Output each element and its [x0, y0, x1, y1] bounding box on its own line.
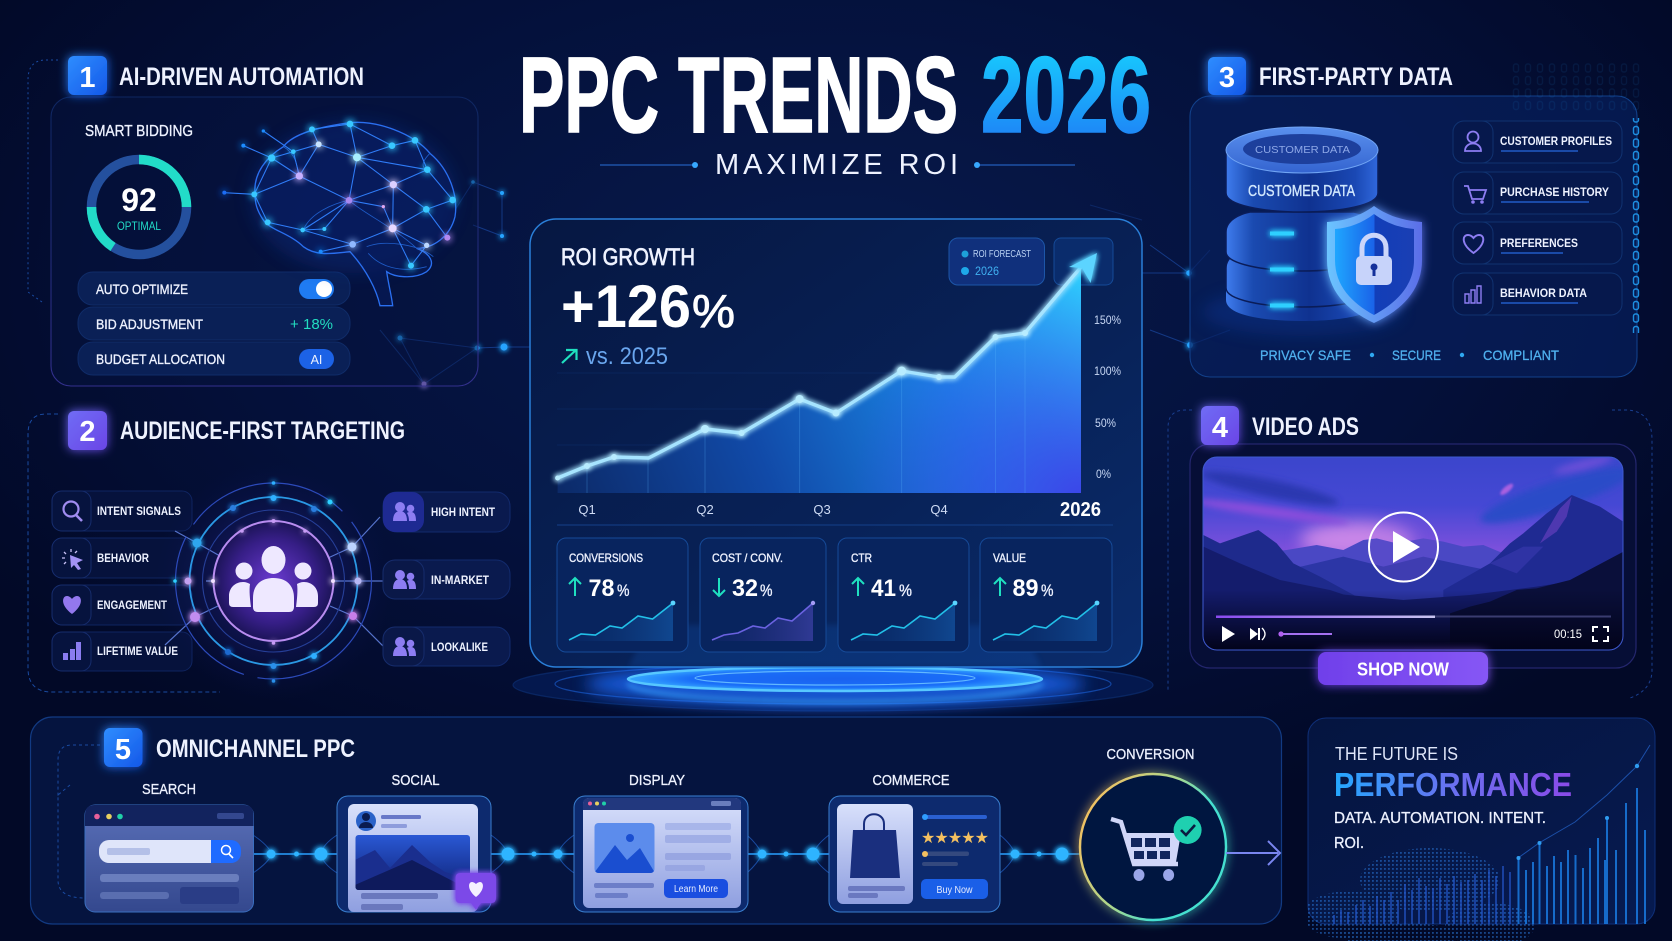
row: auto optimize: AUTO OPTIMIZE [96, 281, 188, 297]
chart trend nodes [1516, 745, 1650, 860]
x axis labels [578, 499, 1101, 521]
smart bidding label: SMART BIDDING [85, 123, 193, 140]
metric card: conversions: % [617, 581, 630, 600]
step: search [85, 782, 254, 912]
panel frame [1190, 96, 1637, 377]
step: social [337, 773, 496, 912]
panel frame [1308, 718, 1655, 924]
progress bar [1216, 616, 1611, 618]
y axis labels: 50% [1095, 418, 1116, 430]
trend line [558, 267, 1081, 478]
privacy line: PRIVACY SAFE [1260, 347, 1351, 363]
dashboard frame [530, 219, 1142, 667]
connector bracket [28, 60, 58, 302]
metric card: cost per conversion: % [760, 581, 772, 600]
icon: cart [1111, 816, 1202, 881]
row: engagement: ENGAGEMENT [97, 598, 168, 612]
badge 5: 5 [115, 734, 131, 766]
gauge [91, 160, 186, 254]
panel: audience-first targeting [28, 411, 510, 701]
x axis labels: Q3 [813, 502, 831, 517]
row: lookalike [383, 627, 510, 666]
audience orbit hub [154, 461, 394, 701]
panel: AI-driven automation [28, 56, 478, 386]
row: high intent: HIGH INTENT [431, 505, 496, 519]
row: lifetime value: LIFETIME VALUE [97, 644, 178, 658]
step: conversion [1080, 747, 1226, 920]
row: intent signals: INTENT SIGNALS [97, 504, 181, 518]
database cylinder [1202, 127, 1402, 336]
metric card: ctr [838, 538, 969, 652]
row: bid adjustment: BID ADJUSTMENT [96, 316, 203, 332]
y axis labels: 0% [1096, 469, 1111, 481]
left signal rows [52, 491, 192, 671]
panel: the future is performance [1302, 718, 1655, 941]
light beams [628, 625, 1042, 667]
metric card: value: % [1041, 581, 1054, 600]
title: PPC TRENDS: PPC TRENDS [519, 34, 958, 155]
metric card: cost per conversion: 32 [732, 575, 758, 602]
y axis labels: 100% [1094, 366, 1121, 378]
brain illustration [222, 120, 457, 306]
subtitle: MAXIMIZE ROI [715, 149, 958, 181]
x axis labels: Q2 [696, 502, 714, 517]
badge 2 [68, 411, 107, 450]
badge 2: 2 [79, 416, 96, 448]
network nodes background [398, 180, 1193, 386]
y axis labels: 150% [1094, 315, 1121, 327]
badge 3 [1208, 57, 1246, 95]
top label: CUSTOMER DATA [1255, 145, 1350, 156]
binary texture [1630, 118, 1642, 333]
metric card: cost per conversion [700, 538, 826, 652]
row: high intent [383, 492, 510, 532]
row: bid adjustment [78, 307, 350, 340]
player controls: 00:15 [1554, 627, 1582, 641]
row: lifetime value [52, 632, 192, 671]
badge 1 [68, 56, 107, 95]
row: behavior data: BEHAVIOR DATA [1500, 286, 1587, 300]
row: engagement [52, 585, 192, 625]
row: behavior [52, 538, 192, 578]
panel: video ads [1168, 406, 1652, 698]
step: commerce: COMMERCE [872, 773, 950, 789]
panel frame [51, 97, 478, 386]
privacy line: SECURE [1392, 347, 1441, 363]
step: search: SEARCH [142, 782, 196, 798]
y axis labels [1094, 315, 1121, 481]
metric card: ctr: CTR [851, 551, 872, 565]
right segment rows [383, 492, 510, 666]
metric card: ctr: % [899, 581, 912, 600]
x axis labels: Q4 [930, 502, 948, 517]
video player [1190, 453, 1637, 650]
trend points [555, 330, 1028, 480]
bracket [58, 745, 100, 898]
step: social: SOCIAL [392, 773, 440, 789]
text: performance: PERFORMANCE [1334, 766, 1572, 803]
title [519, 34, 1151, 155]
vs. 2025: vs. 2025 [586, 343, 668, 370]
big number: +126 [561, 273, 691, 340]
icon: audience people [229, 546, 318, 612]
panel: omnichannel PPC [30, 717, 1282, 924]
flow arrow [1226, 841, 1280, 865]
step: display: DISPLAY [629, 773, 685, 789]
roi forecast chip [949, 238, 1113, 285]
subtitle [600, 149, 1075, 181]
heading: FIRST-PARTY DATA [1259, 63, 1453, 91]
badge 5 [104, 728, 142, 767]
side label: CUSTOMER DATA [1248, 183, 1356, 200]
rising bar chart [1334, 788, 1645, 924]
shop now button: SHOP NOW [1357, 660, 1449, 680]
x axis labels: Q1 [578, 502, 596, 517]
gauge: 92 [121, 182, 157, 218]
title: 2026: 2026 [981, 34, 1151, 155]
network lines background [380, 182, 1230, 384]
row: preferences: PREFERENCES [1500, 236, 1578, 250]
heading: OMNICHANNEL PPC [156, 735, 355, 763]
metric card: value [980, 538, 1112, 652]
roi forecast chip: 2026 [975, 264, 999, 278]
row: in-market [383, 560, 510, 599]
row: purchase history: PURCHASE HISTORY [1500, 185, 1609, 199]
row: in-market: IN-MARKET [431, 573, 490, 587]
play button [1369, 512, 1438, 582]
connector bracket [1168, 410, 1652, 698]
metric card: conversions: 78 [588, 575, 614, 602]
row: behavior: BEHAVIOR [97, 551, 149, 565]
row: budget allocation: BUDGET ALLOCATION [96, 351, 225, 367]
row: budget allocation [78, 342, 350, 375]
orbit nodes [173, 481, 362, 683]
metric card: conversions [557, 538, 688, 652]
gauge: OPTIMAL [117, 219, 161, 233]
metric card: conversions: CONVERSIONS [569, 551, 643, 565]
like bubble [456, 873, 496, 910]
trend arrow [1069, 253, 1097, 283]
step: commerce: Buy Now [936, 885, 973, 896]
row: preferences [1453, 222, 1622, 264]
row: behavior data [1453, 273, 1622, 315]
metric card: value: 89 [1012, 575, 1038, 602]
heading: AUDIENCE-FIRST TARGETING [120, 417, 405, 445]
row: purchase history [1453, 172, 1622, 214]
row: customer profiles: CUSTOMER PROFILES [1500, 134, 1612, 148]
privacy line: COMPLIANT [1483, 347, 1559, 363]
row: customer profiles [1453, 121, 1622, 163]
panel: first-party data [1190, 57, 1642, 377]
badge 4: 4 [1212, 412, 1228, 444]
shield with lock [1327, 206, 1422, 323]
connectors [253, 835, 1080, 873]
privacy line [1260, 347, 1559, 363]
step: display [574, 773, 748, 912]
step: commerce: ★★★★★ [921, 830, 989, 847]
badge 1: 1 [79, 62, 96, 94]
heading: VIDEO ADS [1252, 413, 1359, 441]
big number: % [692, 285, 735, 337]
panel frame [1190, 444, 1636, 668]
panel: ROI growth dashboard [513, 219, 1153, 711]
row: bid adjustment: + 18% [290, 316, 333, 333]
step: conversion: CONVERSION [1106, 747, 1194, 763]
row: auto optimize [78, 272, 350, 305]
roi forecast chip: ROI FORECAST [973, 249, 1031, 260]
metric card: ctr: 41 [871, 575, 896, 602]
heading: ROI GROWTH [561, 244, 695, 271]
row: lookalike: LOOKALIKE [431, 640, 488, 654]
row: budget allocation: AI [311, 353, 322, 367]
shop now button [1318, 652, 1488, 685]
text: the future is: THE FUTURE IS [1335, 744, 1458, 764]
connector bracket [28, 414, 220, 692]
panel frame [30, 717, 1282, 924]
world map dots [1302, 848, 1535, 941]
metric card: value: VALUE [993, 551, 1026, 565]
video frame [1203, 457, 1623, 650]
roi line chart [555, 253, 1097, 493]
step: display: Learn More [674, 884, 718, 895]
row: intent signals [52, 491, 192, 531]
player controls [1222, 626, 1608, 642]
badge 4 [1201, 406, 1239, 445]
platform glow [513, 659, 1153, 711]
metric card: cost per conversion: COST / CONV. [712, 551, 783, 565]
text: data automation intent: DATA. AUTOMATION. INTENT. [1334, 810, 1546, 827]
heading: AI-DRIVEN AUTOMATION [119, 63, 364, 91]
x axis labels: 2026 [1060, 499, 1101, 521]
step: commerce [829, 773, 1000, 912]
badge 3: 3 [1219, 62, 1235, 94]
text: roi: ROI. [1334, 835, 1364, 852]
